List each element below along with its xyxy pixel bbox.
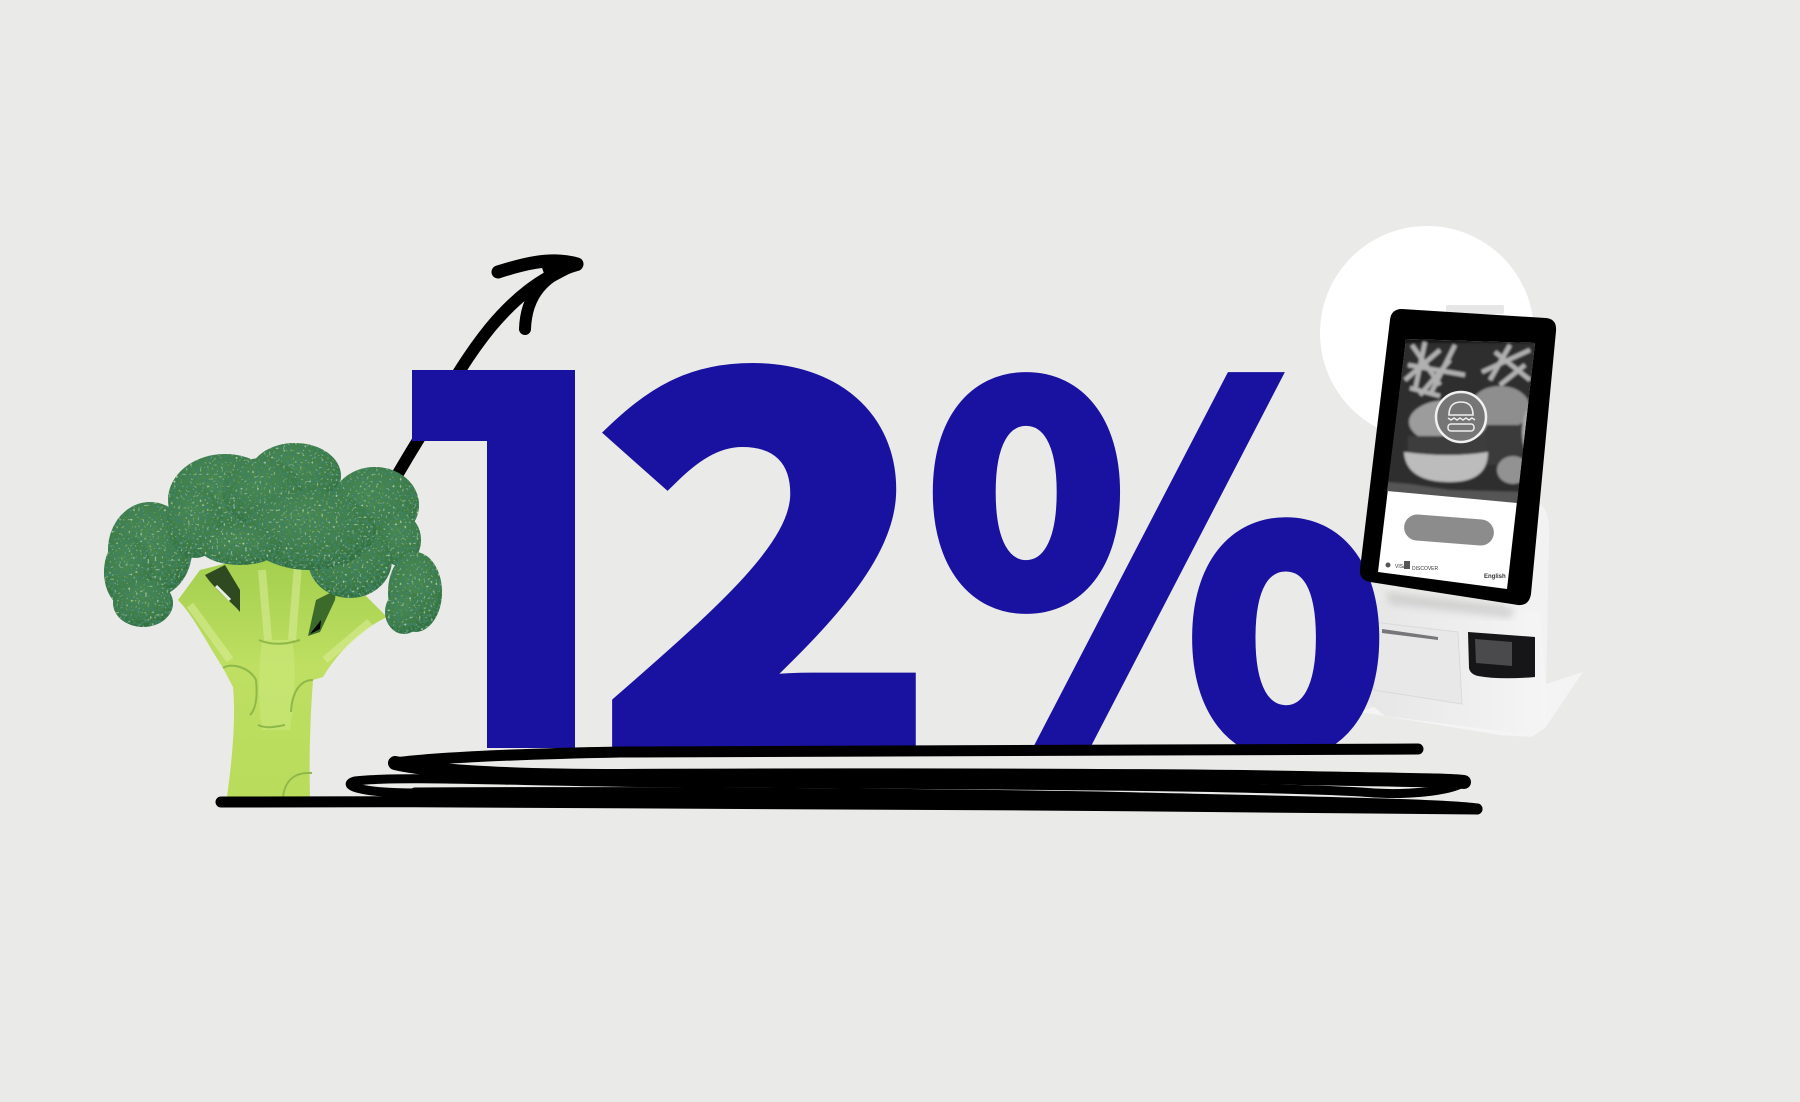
white circle behind kiosk (1320, 226, 1534, 440)
tablet screen white (1378, 339, 1535, 589)
kiosk base and printer body (1360, 500, 1583, 737)
headline: 12% (412, 363, 1380, 748)
food photo (1387, 339, 1535, 503)
burger logo badge (1436, 392, 1486, 442)
kiosk tablet (1360, 305, 1556, 605)
broccoli florets (104, 443, 442, 634)
tablet bezel (1360, 309, 1556, 605)
arrow (315, 259, 580, 628)
tablet top tab (1446, 305, 1504, 314)
digit 2: 2 (602, 162, 930, 895)
scribble underline (221, 749, 1477, 809)
grey pill button (1403, 514, 1495, 546)
digit 1: 1 (370, 269, 709, 861)
percent sign: % (924, 181, 1388, 887)
payment and language row: VISA (1395, 564, 1407, 570)
payment and language row: English (1484, 574, 1506, 580)
payment and language row (1386, 561, 1506, 580)
payment and language row: DISCOVER (1412, 566, 1439, 572)
broccoli stem (178, 560, 387, 797)
broccoli (104, 443, 442, 797)
